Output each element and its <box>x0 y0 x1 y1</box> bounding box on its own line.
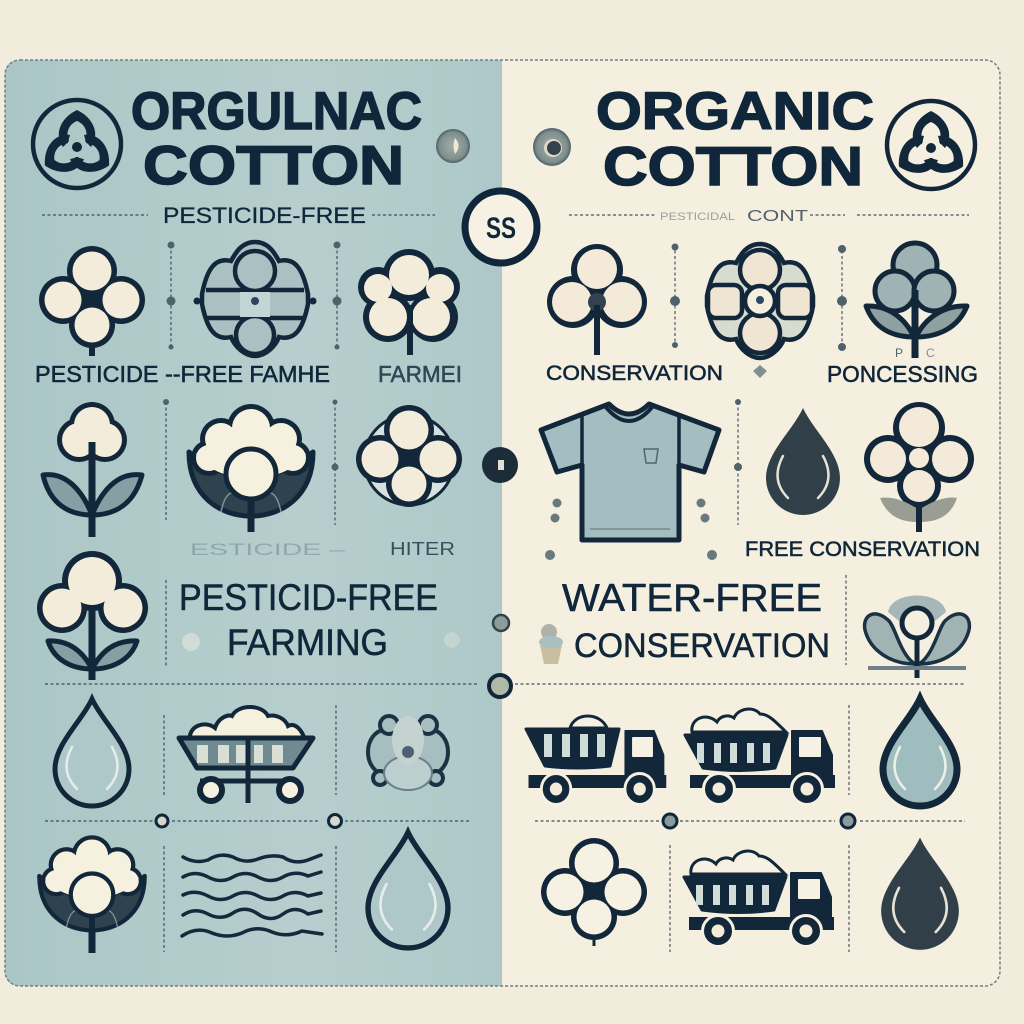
icon: diamond marker <box>753 365 767 378</box>
icon: dark water drop <box>766 408 840 515</box>
icon: ornate flower row 4 <box>368 716 448 790</box>
label: free conservation: FREE CONSERVATION <box>745 538 980 561</box>
icon: cotton row 2 right <box>356 405 462 507</box>
icon: faint bud right <box>444 632 460 648</box>
icon: truck row 5 <box>684 851 834 946</box>
icon: cotton with leaves <box>864 402 974 532</box>
heading: pesticide free farming: FARMING <box>227 622 388 663</box>
right title <box>596 82 874 197</box>
label: pesticide free farm: PESTICIDE --FREE FAMHE <box>35 361 330 387</box>
label: processing: PONCESSING <box>827 361 978 387</box>
faint label row 3: ESTICIDE – <box>190 540 346 559</box>
heading: pesticide free farming: PESTICID-FREE <box>179 577 438 618</box>
badge: center dot <box>482 447 518 483</box>
icon: gray leaf flower <box>866 243 967 358</box>
icon: right bead <box>533 128 571 166</box>
icon: left biohazard <box>33 100 121 188</box>
label: processing: P <box>895 346 903 360</box>
label: processing <box>827 346 978 387</box>
icon: faint bud left <box>182 633 200 651</box>
icon: small cup <box>539 624 563 664</box>
badge: versus SS: SS <box>486 212 516 245</box>
icon: water drop row 4 <box>55 699 129 806</box>
badge: small bead <box>493 615 509 631</box>
icon: right biohazard <box>887 101 975 189</box>
heading: water free conservation <box>562 577 830 665</box>
left subtitle: PESTICIDE-FREE <box>163 203 366 228</box>
right title: ORGANIC <box>596 82 874 141</box>
label: farmer: FARMEI <box>378 361 462 387</box>
badge: center ring <box>489 675 511 697</box>
icon: cotton flower with leaves row 3 <box>37 551 148 680</box>
faint label row 3: HITER <box>390 539 455 559</box>
icon: ring flower left <box>202 242 308 356</box>
heading: water free conservation: CONSERVATION <box>574 627 830 665</box>
icon: ring flower right <box>707 244 813 358</box>
right title: COTTON <box>603 135 863 197</box>
label: processing: C <box>926 346 935 360</box>
left title <box>131 82 422 196</box>
icon: boll row 5 <box>39 835 145 953</box>
icon: t-shirt side marks <box>545 498 717 560</box>
label: conservation: CONSERVATION <box>546 362 723 385</box>
faint subtitle: CONT <box>747 208 808 225</box>
icon: outlined plant <box>865 596 969 678</box>
icon: cotton row 1 left <box>39 246 145 356</box>
icon: cotton row 5 <box>541 838 647 946</box>
faint label row 3 <box>190 539 455 559</box>
icon: water drop row 4 <box>883 699 957 806</box>
heading: pesticide free farming <box>179 577 438 663</box>
icon: boll row 2 <box>189 404 313 532</box>
icon: water drop row 5 <box>368 832 448 948</box>
left title: COTTON <box>143 134 404 196</box>
icon: waves row 5 <box>182 855 322 936</box>
faint subtitle: PESTICIDAL <box>660 211 735 223</box>
icon: truck row 4 second <box>685 709 835 804</box>
icon: cotton flower right of row 1 <box>358 249 460 355</box>
left title: ORGULNAC <box>131 82 422 141</box>
heading: water free conservation: WATER-FREE <box>562 577 822 620</box>
icon: cart row 4 <box>179 707 313 803</box>
icon: dark water drop row 5 <box>881 838 959 950</box>
panel: left side <box>5 60 502 986</box>
icon: cotton flower with leaves row 2 <box>43 402 142 537</box>
small node dots <box>156 814 855 828</box>
panel: right side <box>502 60 1000 986</box>
icon: truck row 4 first <box>526 716 666 804</box>
badge: versus SS <box>465 191 537 263</box>
small marker dots <box>163 242 847 471</box>
icon: t-shirt <box>541 404 719 540</box>
icon: three lobed cotton <box>547 244 647 355</box>
faint subtitle <box>660 208 808 225</box>
icon: left bead <box>436 129 470 163</box>
